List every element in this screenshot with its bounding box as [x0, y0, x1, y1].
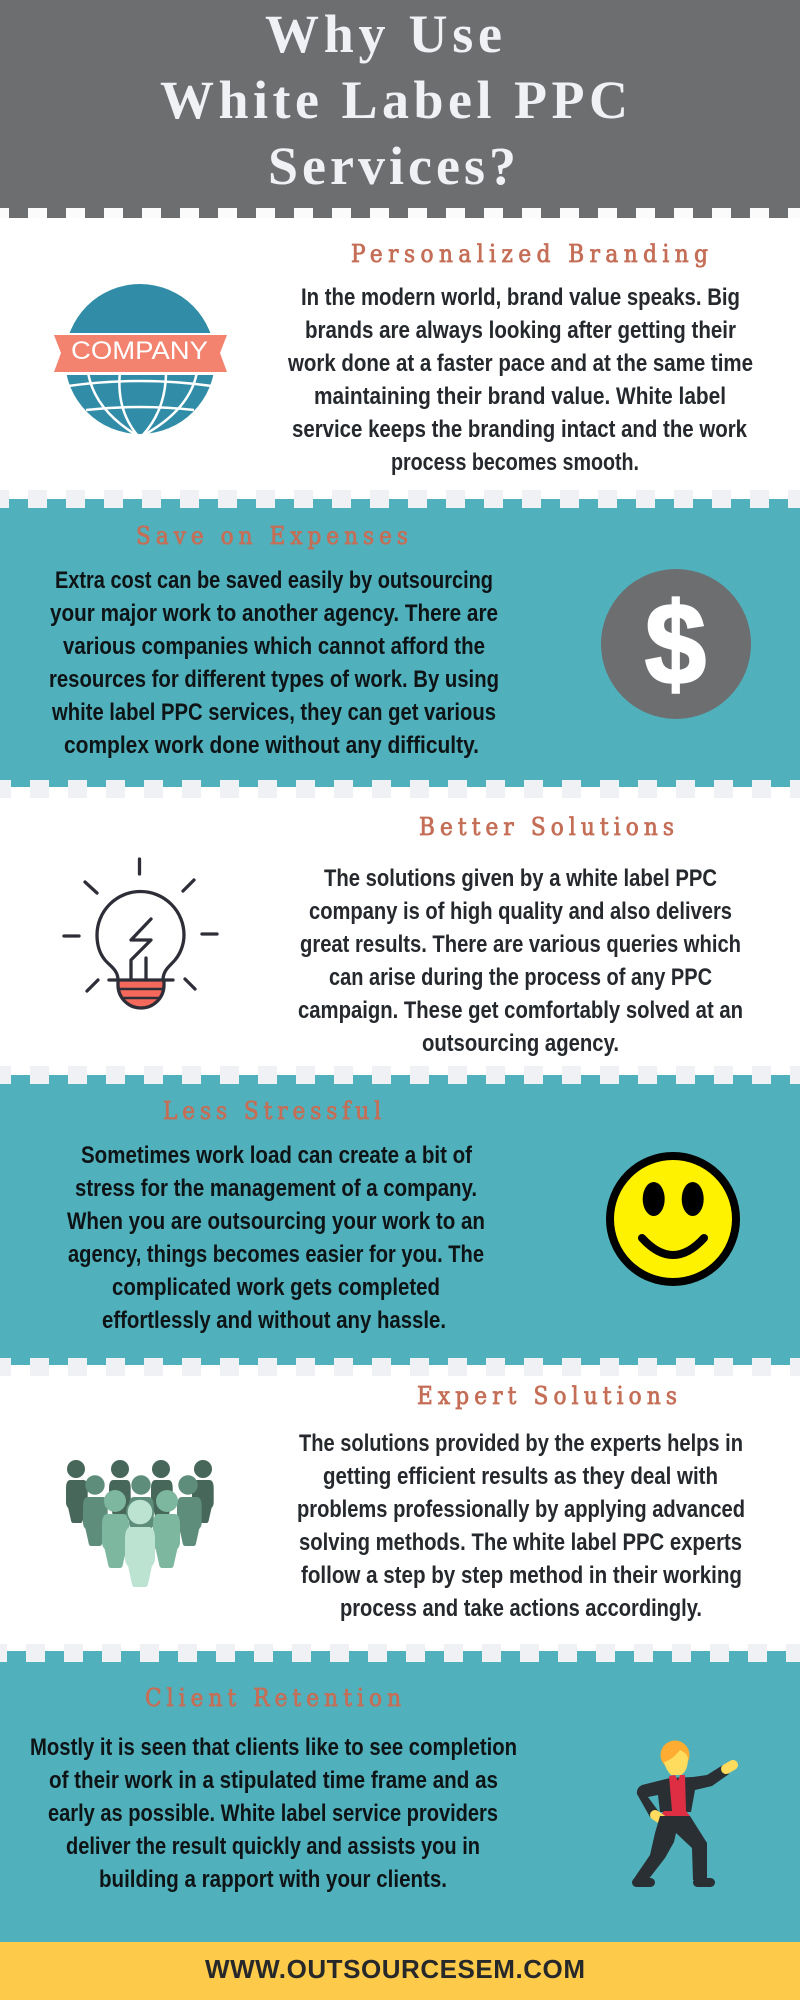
text: save on expenses: various companies which cannot afford the — [63, 633, 485, 660]
text: less stressful: Sometimes work load can create a bit of — [81, 1142, 473, 1169]
panel: personalized branding — [54, 243, 752, 475]
text: client retention — [30, 1734, 517, 1893]
panel: save on expenses — [0, 499, 800, 787]
text: save on expenses — [49, 567, 499, 759]
header banner — [0, 0, 800, 218]
heading: better solutions: Better Solutions — [419, 813, 674, 841]
text: save on expenses: complex work done without any difficulty. — [64, 732, 479, 759]
title: Why Use — [265, 4, 502, 64]
website url: WWW.OUTSOURCESEM.COM — [205, 1954, 585, 1984]
text: personalized branding: brands are always looking after getting their — [305, 317, 736, 344]
text: less stressful: When you are outsourcing your work to an — [67, 1208, 485, 1235]
text: less stressful: complicated work gets completed — [112, 1274, 440, 1301]
panel: expert solutions — [0, 1365, 800, 1651]
icon: dollar coin — [601, 569, 751, 719]
text: save on expenses: white label PPC services, they can get various — [51, 699, 496, 726]
text: save on expenses: Extra cost can be saved easily by outsourcing — [55, 567, 493, 594]
text: better solutions: outsourcing agency. — [422, 1030, 619, 1057]
text: personalized branding: process becomes smooth. — [391, 449, 639, 476]
title: Services? — [268, 136, 516, 196]
title — [160, 4, 628, 196]
text: client retention: of their work in a stipulated time frame and as — [49, 1767, 498, 1794]
text: save on expenses: resources for different types of work. By using — [49, 666, 499, 693]
panel: better solutions — [62, 816, 742, 1056]
text: personalized branding: maintaining their brand value. White label — [314, 383, 726, 410]
text: expert solutions — [297, 1430, 745, 1622]
text: client retention: early as possible. White label service providers — [48, 1800, 498, 1827]
text: client retention: building a rapport with your clients. — [99, 1866, 447, 1893]
text: personalized branding — [287, 284, 753, 476]
text: less stressful: agency, things becomes easier for you. The — [68, 1241, 484, 1268]
title: White Label PPC — [160, 70, 628, 130]
text: better solutions: The solutions given by a white label PPC — [324, 865, 717, 892]
icon: smiley face — [610, 1156, 736, 1282]
panel: client retention — [0, 1651, 800, 1942]
text: less stressful: stress for the management of a company. — [75, 1175, 477, 1202]
heading: less stressful: Less Stressful — [163, 1097, 381, 1125]
text: better solutions — [298, 865, 743, 1057]
text: better solutions: company is of high quality and also delivers — [309, 898, 732, 925]
text: client retention: Mostly it is seen that clients like to see completion — [30, 1734, 517, 1761]
heading: client retention: Client Retention — [145, 1684, 401, 1712]
icon: company globe: COMPANY — [71, 337, 208, 365]
icon: light bulb — [64, 859, 217, 1008]
icon: group of people — [66, 1460, 214, 1587]
text: client retention: deliver the result quickly and assists you in — [66, 1833, 480, 1860]
heading: expert solutions: Expert Solutions — [417, 1382, 677, 1410]
panel: less stressful — [0, 1075, 800, 1365]
text: less stressful: effortlessly and without any hassle. — [102, 1307, 446, 1334]
footer bar — [0, 1942, 800, 2000]
heading: save on expenses: Save on Expenses — [136, 522, 408, 550]
text: expert solutions: getting efficient results as they deal with — [323, 1463, 718, 1490]
icon: dancing man — [632, 1740, 733, 1887]
text: save on expenses: your major work to another agency. There are — [50, 600, 498, 627]
icon: dollar coin: $ — [645, 579, 706, 709]
text: better solutions: can arise during the process of any PPC — [329, 964, 712, 991]
text: expert solutions: process and take actions accordingly. — [340, 1595, 702, 1622]
icon: company globe — [54, 284, 227, 436]
text: less stressful — [67, 1142, 485, 1334]
heading: personalized branding: Personalized Branding — [351, 240, 708, 268]
